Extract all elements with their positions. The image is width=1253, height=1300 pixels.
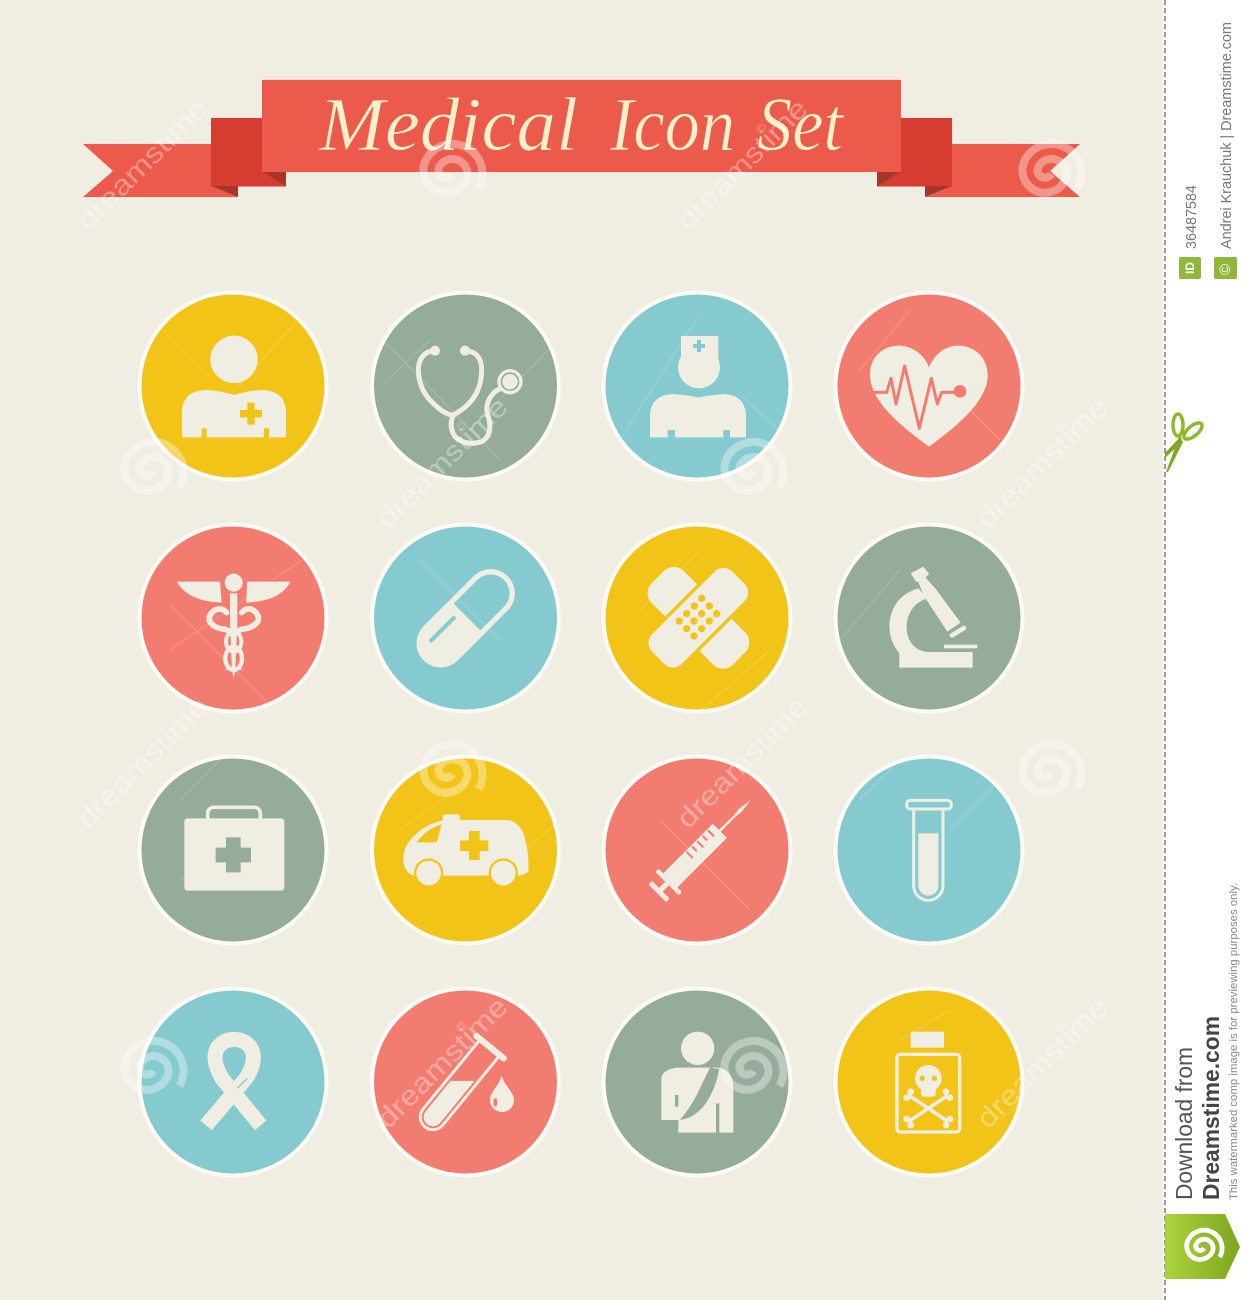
title text: Icon — [609, 83, 735, 167]
watermark text: © — [1053, 417, 1070, 435]
caduceus icon badge — [138, 522, 328, 714]
ribbon main band — [262, 76, 901, 172]
Dreamstime label: Dreamstime.com — [1198, 1016, 1224, 1200]
preview notice: This watermarked comp image is for previewing purposes only. — [1228, 883, 1240, 1200]
ribbon right fold — [877, 118, 952, 197]
watermark text: dreamstime — [670, 93, 814, 236]
pill capsule icon badge — [370, 522, 561, 714]
test tube icon badge — [834, 754, 1024, 946]
stethoscope icon badge — [370, 290, 561, 482]
heart with ECG icon badge — [834, 290, 1024, 482]
ribbon right tail — [925, 144, 1080, 197]
watermark text: dreamstime — [670, 691, 814, 834]
bandage icon badge — [602, 522, 792, 714]
scissors icon — [1165, 414, 1205, 472]
ambulance icon badge — [370, 754, 561, 946]
image id badge — [1179, 257, 1201, 279]
title text: Set — [757, 83, 845, 167]
image id badge: ID — [1183, 262, 1197, 274]
microscope icon badge — [834, 522, 1024, 714]
copyright badge — [1214, 257, 1237, 279]
green logo tag — [1165, 1214, 1240, 1279]
author credit: Andrei Krauchuk | Dreamstime.com — [1219, 22, 1235, 249]
watermark text: © — [453, 1017, 470, 1035]
copyright badge: © — [1217, 264, 1234, 275]
doctor icon badge — [138, 290, 328, 482]
download from label: Download from — [1171, 1047, 1197, 1200]
side strip — [1165, 0, 1240, 1300]
poison bottle icon badge — [834, 986, 1024, 1178]
image id number: 36487584 — [1184, 185, 1200, 249]
watermark text: © — [753, 717, 770, 735]
syringe icon badge — [602, 754, 792, 946]
title text — [318, 83, 845, 167]
first aid kit icon badge — [138, 754, 328, 946]
watermark text: dreamstime — [370, 991, 514, 1134]
injured person icon badge — [602, 986, 792, 1178]
blood sample icon badge — [370, 986, 561, 1178]
watermark text: dreamstime — [370, 391, 514, 534]
watermark text: © — [1053, 1017, 1070, 1035]
watermark text: © — [453, 417, 470, 435]
watermark text: © — [153, 717, 170, 735]
watermark text: dreamstime — [970, 391, 1114, 534]
ribbon left tail — [83, 144, 238, 197]
watermark text: dreamstime — [970, 991, 1114, 1134]
icon grid — [138, 290, 1024, 1178]
title text: Medical — [318, 83, 578, 167]
watermark spirals — [116, 133, 1092, 1105]
ribbon left fold — [211, 118, 286, 197]
watermark text: dreamstime — [70, 93, 214, 236]
watermark text: © — [153, 119, 170, 137]
watermark text: dreamstime — [70, 691, 214, 834]
nurse icon badge — [602, 290, 792, 482]
watermark text — [70, 93, 1114, 1134]
title ribbon — [83, 76, 1080, 197]
awareness ribbon icon badge — [138, 986, 328, 1178]
watermark text: © — [753, 119, 770, 137]
